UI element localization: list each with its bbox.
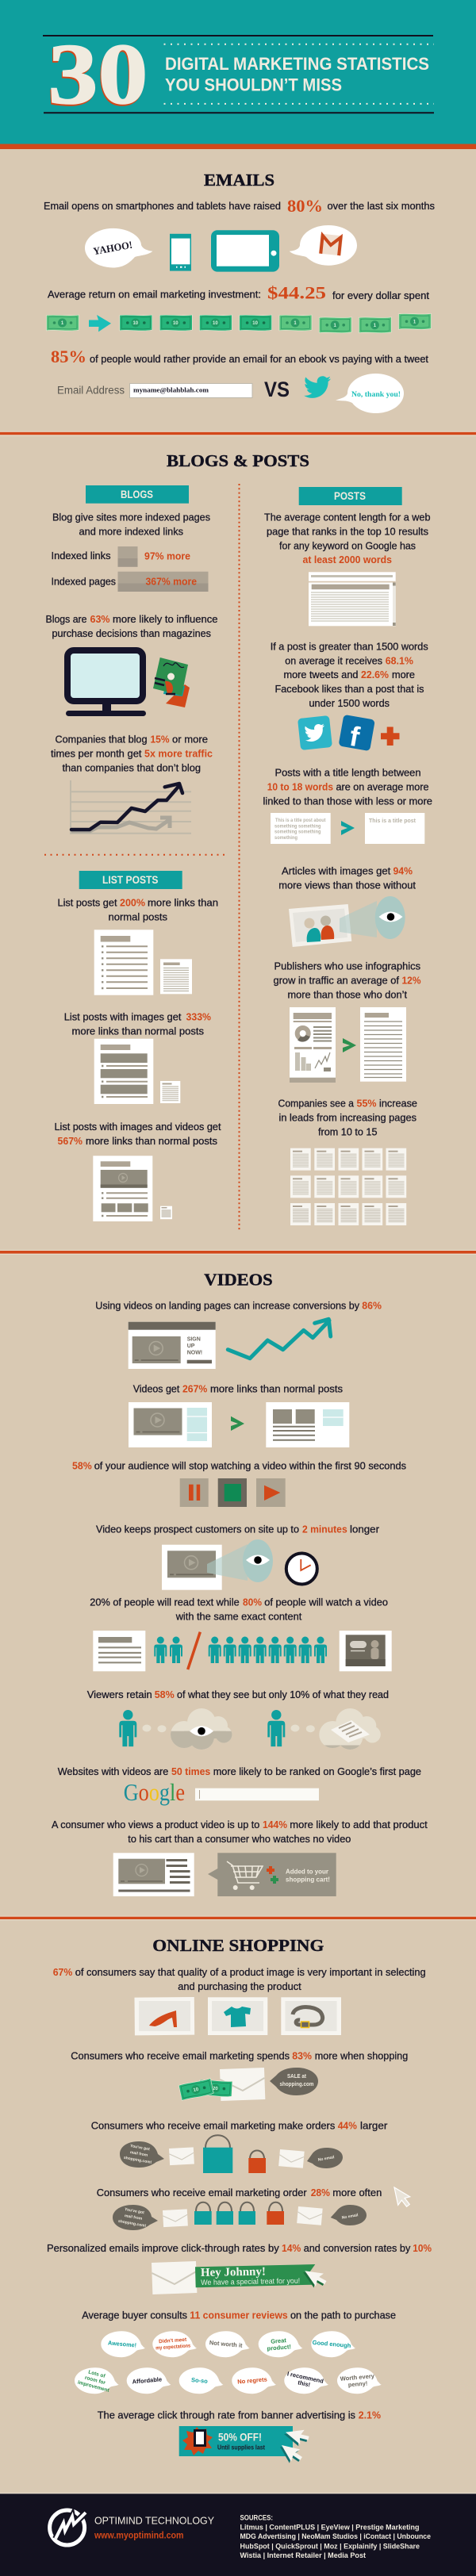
ribbon: blogs [86, 485, 189, 504]
illustration: long title vs short title: something [274, 835, 298, 841]
stat: 10 to 18 words: are on average more [336, 781, 428, 793]
product image: belt [281, 1997, 341, 2035]
stat: 10 to 18 words: linked to than those with less or more [263, 795, 432, 807]
email form field: myname@blahblah.com [133, 387, 209, 393]
heading: blogs and posts: BLOGS & POSTS [167, 451, 309, 470]
bar chart: indexed links and pages: Indexed pages [51, 576, 116, 588]
stat: 12%: grow in traffic an average of [273, 975, 399, 987]
stat: 86%: Using videos on landing pages can increase conversions by [95, 1300, 359, 1312]
icon: clock [286, 1553, 317, 1585]
illustration: order frequency bags: mail from [124, 2214, 143, 2221]
stat: 5x more traffic: than companies that don’t blog [62, 762, 201, 774]
icon: yahoo speech bubble: YAHOO! [92, 239, 133, 257]
stat: 83%: more when shopping [315, 2049, 408, 2061]
arrow: rising conversions [228, 1319, 331, 1359]
stat: 55%: increase [379, 1098, 417, 1110]
review bubbles: product! [267, 2343, 291, 2352]
illustration: email with money: SALE at [287, 2074, 307, 2080]
stat: 200%: more links than [148, 897, 218, 909]
logo: optimind [50, 2510, 86, 2545]
illustration: list post with images [94, 1039, 180, 1104]
illustration: personalized email banner: Hey Johnny! [201, 2266, 266, 2279]
stat: 68.1% and 22.6%: Facebook likes than a post that is [274, 683, 424, 695]
stat: 50 times: 50 times [171, 1765, 210, 1777]
stat: 14% and 10% [47, 2242, 432, 2254]
logo and search bar: google [124, 1778, 319, 1806]
stat: 20% read vs 80% watch: of people will watch a video [264, 1597, 388, 1608]
stat: $44.25 return [48, 282, 429, 302]
stat: 80% email opens: Email opens on smartphones and tablets have raised [44, 200, 281, 212]
stat: 333%: List posts with images get [64, 1011, 182, 1023]
stat: 144%: to his cart than a consumer who watches no video [128, 1833, 351, 1845]
illustration: bags with and without email: No email [317, 2155, 336, 2163]
stat: 144%: more likely to add that product [290, 1819, 428, 1830]
ribbon: list posts: LIST POSTS [102, 874, 159, 886]
stat: 5x more traffic: Companies that blog [56, 734, 148, 746]
stat: 28%: 28% [311, 2187, 330, 2198]
illustration: order frequency bags: No email [341, 2213, 359, 2221]
stat: 85%: of people would rather provide an email for an ebook vs paying with a tweet [90, 353, 428, 365]
stat: 144%: 144% [263, 1819, 287, 1830]
illustration: fifteen pages [290, 1148, 406, 1225]
title: DIGITAL MARKETING STATISTICS [165, 54, 429, 74]
stat: 14% and 10%: Personalized emails improve click-through rates by [47, 2242, 279, 2254]
illustration: personalized email banner [152, 2261, 329, 2294]
label: VS: VS [264, 378, 290, 401]
review bubbles: Awesome! [108, 2339, 136, 2349]
stat: 83%: 83% [292, 2049, 312, 2061]
review bubbles: this! [298, 2379, 311, 2388]
product image: shoe [134, 1997, 194, 2035]
arrow [89, 315, 111, 332]
callout: added to cart: Added to your [286, 1867, 329, 1875]
review bubbles: Didn't meet [159, 2337, 187, 2344]
illustration: long title vs short title: This is a title post [369, 817, 416, 824]
review bubbles: Good enough [312, 2339, 351, 2349]
illustration: order frequency bags: You've got [125, 2207, 145, 2215]
stat: 267%: more links than normal posts [210, 1383, 343, 1395]
stat: $44.25 return: for every dollar spent [332, 289, 429, 301]
stat: 67%: of consumers say that quality of a product image is very important in selecting [75, 1966, 426, 1978]
stat: at least 2000 words: page that ranks in the top 10 results [267, 525, 428, 537]
stat: 85% [51, 347, 428, 366]
stat: 28%: more often [332, 2187, 382, 2198]
illustration: eye watching video [162, 1539, 273, 1590]
icon: facebook [338, 715, 375, 755]
stat: 55%: from 10 to 15 [318, 1126, 378, 1138]
illustration: email with money [178, 2068, 318, 2101]
sources: MDG Advertising | NeoMam Studios | iContact | Unbounce [240, 2532, 431, 2541]
stat: 200%: List posts get [57, 897, 117, 909]
banner ad: 50% off: Until supplies last [217, 2444, 265, 2451]
heading: videos: VIDEOS [204, 1270, 273, 1289]
stat: 58% audience: 58% [72, 1459, 92, 1471]
icon: twitter bird [304, 376, 331, 398]
sources: Litmus | ContentPLUS | EyeView | Prestige Marketing [240, 2523, 420, 2532]
text: indexed pages intro: Blog give sites more indexed pages [52, 512, 210, 523]
stat: 144% [52, 1819, 428, 1845]
stat: $44.25 return: $44.25 [267, 282, 326, 302]
row of dollar bills: 10 [252, 321, 259, 326]
product image: shirt [208, 1997, 267, 2035]
ribbon: posts: POSTS [334, 490, 366, 502]
stat: 80% email opens [44, 196, 435, 216]
review bubbles [75, 2331, 382, 2394]
email form field: Email Address [57, 384, 125, 397]
stat: 63%: purchase decisions than magazines [52, 627, 211, 639]
illustration: bags with and without email: shopping.com! [123, 2156, 152, 2165]
icon: monitor [66, 650, 146, 716]
heading: emails: EMAILS [204, 171, 274, 190]
icon: facebook: f [347, 721, 362, 753]
illustration: bags with and without email [120, 2135, 343, 2173]
icon: pause stop play buttons [180, 1478, 286, 1507]
icon: magazines [153, 657, 190, 707]
stat: 50 times: more likely to be ranked on Google’s first page [213, 1765, 421, 1777]
stat: 68.1% and 22.6%: more tweets and [284, 669, 359, 680]
stat: 20% read vs 80% watch: with the same exact content [175, 1610, 302, 1622]
stat: 12%: more than those who don’t [287, 989, 407, 1001]
row of dollar bills [46, 313, 432, 333]
illustration: order frequency bags: shopping.com! [117, 2219, 147, 2229]
stat: $44.25 return: Average return on email marketing investment: [48, 288, 261, 300]
email form field [57, 384, 252, 398]
text: indexed pages intro [52, 512, 210, 537]
stat: 5x more traffic: 5x more traffic [144, 748, 213, 760]
stat: 68.1% and 22.6% [271, 640, 428, 709]
stat: 5x more traffic: 15% [151, 734, 170, 746]
illustration: infographic vs text page [290, 1007, 406, 1083]
review bubbles: penny! [347, 2379, 368, 2389]
stat: 10 to 18 words: 10 to 18 words [267, 781, 333, 793]
icon: yahoo speech bubble [85, 228, 152, 268]
illustration: email with money: shopping.com [279, 2082, 314, 2087]
illustration: reader thinking of paper [267, 1708, 381, 1750]
stat: 2.1%: 2.1% [359, 2409, 381, 2421]
stat: 63%: more likely to influence [113, 613, 217, 625]
stat: 94%: Articles with images get [282, 864, 391, 876]
illustration: bags with and without email: mail from [129, 2150, 148, 2158]
bar chart: indexed links and pages: 97% more [144, 550, 190, 562]
stat: 567%: List posts with images and videos get [54, 1121, 221, 1133]
stat: 68.1% and 22.6%: 68.1% [386, 654, 413, 666]
icon: tablet [211, 230, 279, 272]
stat: 44%: Consumers who receive email marketing make orders [91, 2119, 336, 2131]
panel: header banner [0, 0, 476, 149]
panel: videos [52, 1270, 428, 1896]
stat: 11 consumer reviews: Average buyer consults [82, 2310, 187, 2321]
stat: 5x more traffic: times per month get [51, 748, 142, 760]
illustration: viewer thinking of eye [119, 1708, 232, 1750]
stat: 83%: Consumers who receive email marketing spends [71, 2049, 290, 2061]
stat: 44%: larger [360, 2119, 388, 2131]
speech bubble: no thank you: No, thank you! [351, 391, 401, 399]
stat: 58% retained [87, 1689, 389, 1700]
sources: Wistia | Internet Retailer | Media Post [240, 2551, 367, 2560]
stat: 14% and 10%: 14% [282, 2242, 301, 2254]
stat: 55%: Companies see a [278, 1098, 355, 1110]
stat: 5x more traffic: or more [172, 734, 208, 746]
stat: 200%: normal posts [108, 911, 167, 923]
stat: 267%: 267% [182, 1383, 208, 1395]
review bubbles: Great [271, 2336, 287, 2345]
icon: cursor [394, 2185, 412, 2208]
stat: 50 times: Websites with videos are [58, 1765, 168, 1777]
stat: 20% read vs 80% watch: 20% of people will read text while [90, 1597, 240, 1608]
panel: emails [44, 171, 435, 413]
stat: 11 consumer reviews: 11 consumer reviews [190, 2310, 288, 2321]
stat: 63%: 63% [90, 613, 110, 625]
stat: 68.1% and 22.6%: more [392, 669, 415, 680]
bar chart: indexed links and pages [51, 546, 208, 592]
bar chart: indexed links and pages: Indexed links [51, 550, 111, 562]
callout: added to cart [208, 1853, 336, 1896]
review bubbles: Not worth it [209, 2339, 243, 2349]
stat: 20% read vs 80% watch [90, 1597, 388, 1622]
illustration: order frequency bags [113, 2202, 367, 2230]
stat: 67%: 67% [53, 1966, 73, 1978]
callout: added to cart: shopping cart! [286, 1876, 330, 1884]
banner ad: 50% off [179, 2421, 312, 2466]
heading: online shopping: ONLINE SHOPPING [152, 1936, 324, 1955]
stat: 12%: 12% [401, 975, 421, 987]
review bubbles: Worth every [340, 2372, 375, 2382]
banner ad: 50% off: 50% OFF! [218, 2431, 262, 2444]
stat: 58% retained: 58% [155, 1689, 175, 1700]
illustration: long title vs short title: something something [274, 830, 321, 835]
row of dollar bills: 10 [173, 321, 178, 326]
ribbon: posts [299, 487, 402, 505]
sources: SOURCES: [240, 2513, 273, 2522]
stat: 85%: 85% [51, 347, 86, 366]
stat: 5x more traffic [51, 734, 213, 774]
stat: at least 2000 words [264, 512, 430, 565]
title [165, 54, 429, 95]
stat: 63%: Blogs are [46, 613, 87, 625]
stat: 2.1%: The average click through rate from banner advertising is [98, 2409, 355, 2421]
row of dollar bills: 1 [61, 321, 64, 326]
stat: 14% and 10%: and conversion rates by [304, 2242, 411, 2254]
stat: 28%: Consumers who receive email marketing order [97, 2187, 307, 2198]
stat: 144%: A consumer who views a product video is up to [52, 1819, 259, 1830]
row of dollar bills: 1 [334, 324, 337, 328]
row of dollar bills: 10 [213, 321, 218, 326]
stat: 200% [57, 897, 218, 923]
stat: 83% [71, 2049, 408, 2061]
panel: blogs and posts [44, 451, 432, 1230]
illustration: product video page [113, 1853, 194, 1896]
stat: 68.1% and 22.6%: 22.6% [361, 669, 389, 680]
review bubbles: room for [84, 2375, 106, 2386]
illustration: long title vs short title [271, 813, 424, 844]
stat: 11 consumer reviews: on the path to purchase [290, 2310, 396, 2321]
big number 30: 30 [48, 26, 148, 122]
company name and url: www.myoptimind.com [94, 2532, 184, 2541]
stat: 80% email opens: 80% [287, 196, 323, 216]
illustration: text page, people and video [93, 1631, 392, 1671]
review bubbles: improvement [77, 2380, 110, 2394]
illustration: long web page [309, 572, 396, 626]
stat: 12% [273, 960, 421, 1001]
stat: 11 consumer reviews [82, 2310, 396, 2321]
review bubbles: No regrets [237, 2375, 267, 2386]
stat: 94%: 94% [393, 864, 413, 876]
speech bubble: no thank you [336, 374, 404, 413]
illustration: landing page with video [129, 1322, 216, 1369]
stat: at least 2000 words: for any keyword on Google has [279, 539, 416, 551]
review bubbles: Lots of [88, 2370, 106, 2379]
illustration: list post vs normal post [94, 930, 192, 995]
sources [240, 2513, 431, 2560]
illustration: landing page with video: SIGN [187, 1337, 201, 1343]
stat: 10 to 18 words [263, 767, 432, 807]
stat: 68.1% and 22.6%: If a post is greater than 1500 words [271, 640, 428, 652]
title: YOU SHOULDN’T MISS [165, 75, 342, 95]
stat: 58% retained: Viewers retain [87, 1689, 152, 1700]
icon: gmail speech bubble [290, 225, 357, 266]
panel: online shopping [47, 1936, 432, 2466]
stat: at least 2000 words: The average content length for a web [264, 512, 430, 523]
illustration: video post vs normal post [129, 1402, 349, 1447]
stat: 86%: 86% [362, 1300, 382, 1312]
stat: 58% retained: of what they see but only 10% of what they read [177, 1689, 389, 1700]
stat: 68.1% and 22.6%: on average it receives [285, 654, 382, 666]
stat: 567% [54, 1121, 221, 1147]
stat: 2 minutes: Video keeps prospect customers on site up to [96, 1524, 299, 1535]
logo and search bar: google: Google [124, 1778, 185, 1806]
stat: 68.1% and 22.6%: under 1500 words [309, 697, 390, 709]
row of dollar bills: 1 [413, 320, 416, 324]
stat: 58% audience: of your audience will stop watching a video within the first 90 seconds [94, 1459, 406, 1471]
illustration: long title vs short title: something something [274, 823, 321, 829]
stat: 333%: 333% [186, 1011, 211, 1023]
illustration: list post with images and video [93, 1156, 172, 1221]
review bubbles: So-so [191, 2376, 209, 2385]
stat: 567%: more links than normal posts [86, 1135, 217, 1147]
line chart: traffic growth [71, 780, 191, 834]
stat: 55%: in leads from increasing pages [279, 1112, 416, 1124]
illustration: bags with and without email: You've got [130, 2144, 151, 2152]
illustration: email with money: 20 [213, 2087, 218, 2091]
icon: twitter [298, 715, 332, 750]
icon: plus [381, 726, 400, 746]
stat: 14% and 10%: 10% [413, 2242, 432, 2254]
row of dollar bills: 10 [132, 321, 139, 326]
stat: 333%: more links than normal posts [71, 1025, 204, 1037]
row of dollar bills: 1 [294, 321, 297, 326]
stat: 567%: 567% [57, 1135, 83, 1147]
illustration: long title vs short title: This is a title post about [275, 818, 326, 823]
stat: at least 2000 words: at least 2000 words [303, 554, 392, 565]
review bubbles: I recommend [286, 2370, 324, 2385]
ribbon: blogs: BLOGS [121, 489, 153, 500]
icon: smartphone [170, 234, 191, 271]
illustration: eye viewing photo [289, 896, 405, 947]
stat: 94% [278, 864, 416, 891]
stat: 200%: 200% [120, 897, 145, 909]
stat: 267%: Videos get [133, 1383, 180, 1395]
bar chart: indexed links and pages: 367% more [146, 576, 197, 588]
illustration: email with money: 10 [193, 2087, 200, 2093]
review bubbles: my expectations [155, 2343, 191, 2352]
illustration: landing page with video: UP [187, 1344, 195, 1349]
stat: 2 minutes: longer [350, 1524, 380, 1535]
stat: 333% [64, 1011, 211, 1037]
text: indexed pages intro: and more indexed links [79, 525, 183, 537]
row of dollar bills: 1 [374, 324, 377, 328]
stat: 67%: and purchasing the product [178, 1980, 301, 1992]
ribbon: list posts [79, 871, 182, 889]
stat: 267% [133, 1383, 343, 1395]
stat: 44%: 44% [338, 2119, 357, 2131]
review bubbles: Affordable [132, 2375, 162, 2386]
panel: footer [0, 2493, 476, 2576]
company name and url [94, 2515, 214, 2541]
stat: 63% [46, 613, 217, 639]
illustration: personalized email banner: We have a special treat for you! [201, 2277, 300, 2287]
stat: 55% [278, 1098, 417, 1138]
stat: 67% [53, 1966, 426, 1992]
stat: 10 to 18 words: Posts with a title length between [274, 767, 420, 779]
illustration: landing page with video: NOW! [187, 1350, 202, 1355]
stat: 55%: 55% [357, 1098, 377, 1110]
stat: 12%: Publishers who use infographics [274, 960, 420, 972]
stat: 50 times [58, 1765, 421, 1777]
stat: 80% email opens: over the last six months [327, 200, 435, 212]
stat: 94%: more views than those without [278, 879, 416, 891]
stat: 20% read vs 80% watch: 80% [243, 1597, 262, 1608]
sources: HubSpot | QuickSprout | Moz | Explainify | SlideShare [240, 2542, 420, 2551]
stat: 2 minutes: 2 minutes [302, 1524, 347, 1535]
company name and url: OPTIMIND TECHNOLOGY [94, 2515, 214, 2527]
